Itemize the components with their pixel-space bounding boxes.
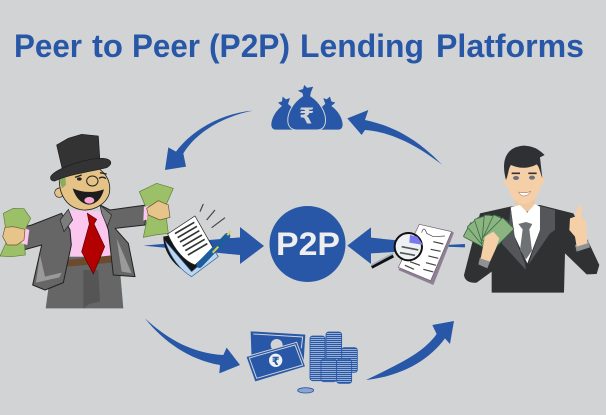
title: Peer bbox=[14, 28, 82, 64]
icon: banknotes bbox=[246, 331, 306, 382]
right hand bbox=[147, 201, 170, 220]
icon: magnifier bbox=[372, 233, 423, 267]
arrow: top left bbox=[165, 111, 253, 170]
hair bbox=[504, 146, 545, 180]
title: (P2P) bbox=[209, 28, 290, 64]
shirt bbox=[511, 204, 540, 263]
left cuff bbox=[21, 228, 29, 245]
left hand bbox=[481, 232, 499, 262]
thumbs up hand bbox=[569, 205, 587, 247]
belt bbox=[68, 255, 112, 267]
icon: single coin bbox=[298, 388, 314, 393]
icon: report document bbox=[398, 224, 454, 285]
neck bbox=[515, 190, 535, 212]
cycle arrows and cash, bottom bbox=[145, 318, 454, 393]
red tie bbox=[82, 213, 105, 274]
icon: rupee money bags bbox=[271, 84, 343, 130]
head bbox=[55, 165, 110, 210]
right cuff bbox=[143, 206, 148, 221]
left cuff bbox=[478, 257, 490, 268]
lender: man with top hat holding cash bbox=[0, 134, 240, 308]
arrow: bottom right bbox=[366, 321, 454, 380]
icon: banknotes: ₹ bbox=[272, 354, 280, 368]
face bbox=[504, 163, 544, 204]
icon: notebook and pen bbox=[163, 204, 231, 277]
arrow: bottom left bbox=[145, 318, 240, 373]
top hat bbox=[51, 134, 111, 181]
lapels bbox=[60, 205, 112, 232]
lapels bbox=[502, 206, 555, 270]
title: Peer bbox=[132, 28, 200, 64]
cash, left hand bbox=[0, 208, 31, 257]
grey tie bbox=[518, 222, 532, 259]
arrow: top right bbox=[347, 110, 442, 165]
P2P hub bbox=[270, 206, 346, 282]
cash, right hand bbox=[139, 183, 173, 237]
left hand bbox=[3, 227, 25, 245]
icon: rupee money bags: ₹ bbox=[299, 104, 314, 129]
shirt bbox=[68, 210, 111, 257]
arrow tail from borrower bbox=[427, 244, 465, 247]
P2P hub: P2P bbox=[276, 226, 340, 262]
arrow: lender to P2P tail bbox=[143, 237, 240, 255]
suit jacket bbox=[464, 205, 599, 293]
arrow and document with magnifier bbox=[347, 224, 465, 285]
borrower: young man in suit with cash and thumbs up bbox=[463, 146, 599, 293]
cycle arrows and money bags, top bbox=[165, 84, 442, 170]
title: Platforms bbox=[436, 28, 584, 64]
title: to bbox=[92, 28, 123, 64]
arrow: borrower into P2P bbox=[347, 227, 400, 264]
jacket bbox=[23, 205, 147, 290]
right cuff bbox=[575, 241, 590, 252]
cash fan bbox=[463, 214, 514, 251]
trousers bbox=[46, 257, 123, 308]
arrow: from lender into P2P bbox=[228, 227, 264, 264]
icon: coin stacks bbox=[310, 332, 357, 383]
title: Lending bbox=[300, 28, 424, 64]
